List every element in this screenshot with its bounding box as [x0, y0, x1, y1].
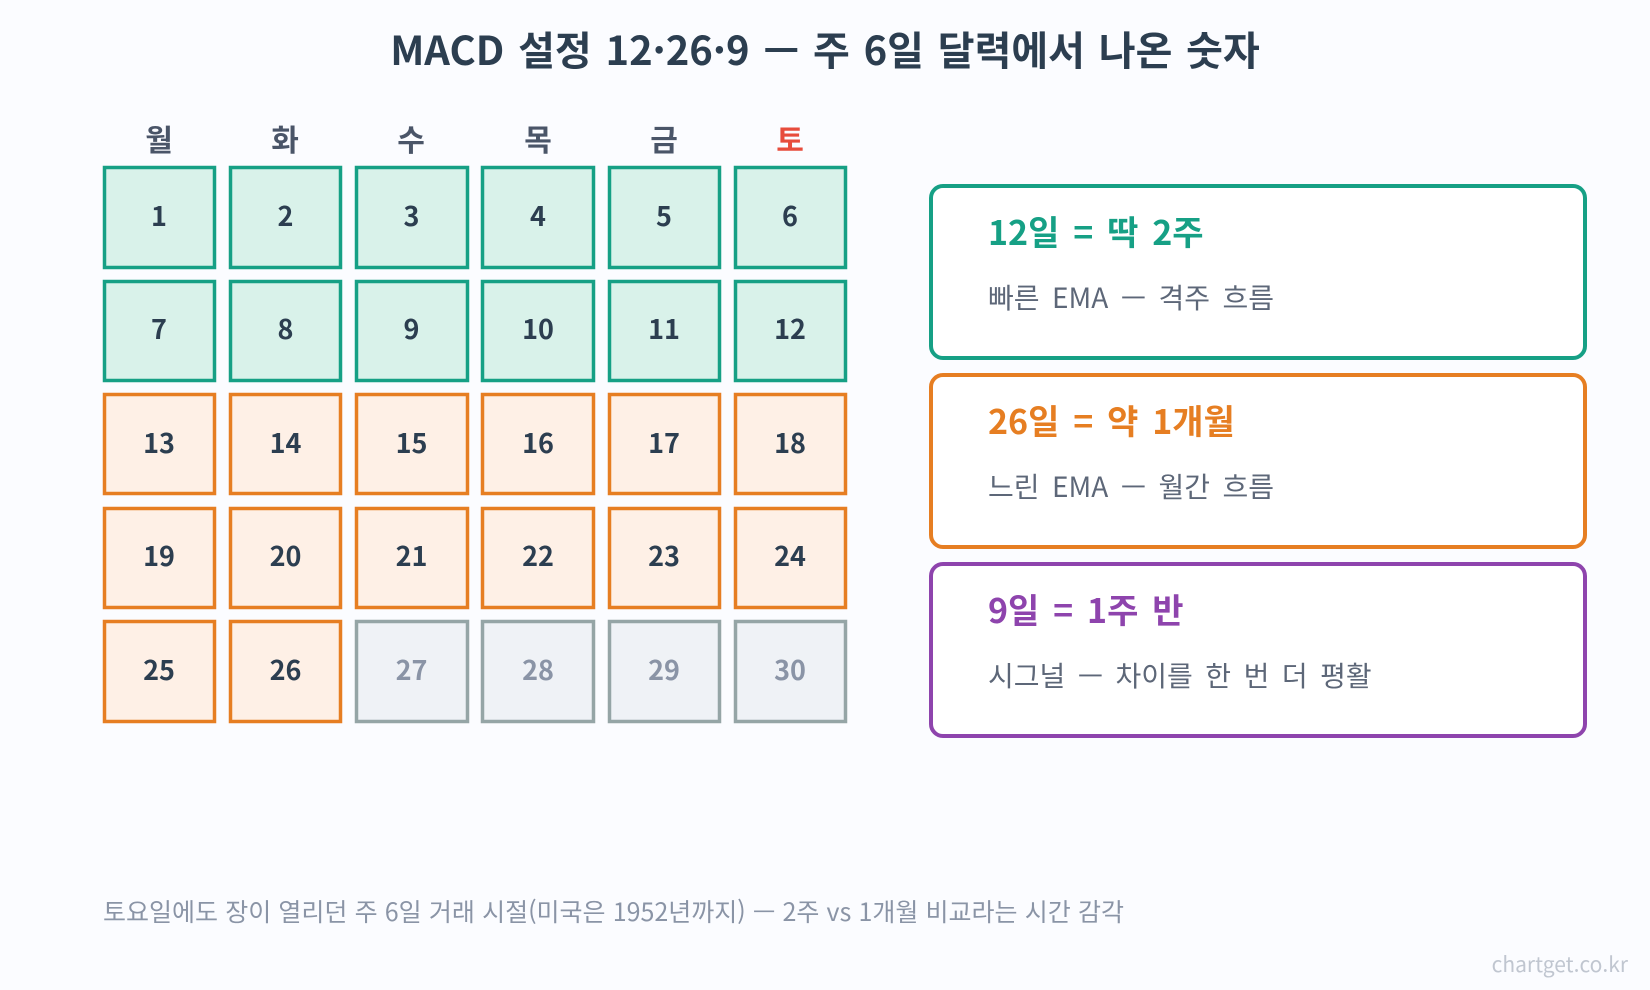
orange days 13 to 26: 14: [270, 422, 301, 461]
orange days 13 to 26: 25: [143, 649, 175, 688]
gray days 27 to 30: 30: [774, 649, 806, 688]
footnote: 토요일에도 장이 열리던 주 6일 거래 시절(미국은 1952년까지) — 2주 vs 1개월 비교라는 시간 감각: [103, 893, 1124, 929]
green days 1 to 12: 11: [648, 308, 680, 347]
panel: 26 days: 느린 EMA — 월간 흐름: [988, 466, 1274, 506]
orange days 13 to 26: 21: [396, 535, 427, 574]
green days 1 to 12: [104, 168, 846, 380]
green days 1 to 12: 5: [656, 195, 672, 234]
orange days 13 to 26: 15: [396, 422, 427, 461]
panel: 26 days: 26일 = 약 1개월: [988, 395, 1235, 444]
title: MACD 설정 12·26·9 — 주 6일 달력에서 나온 숫자: [390, 19, 1260, 77]
gray days 27 to 30: [356, 622, 846, 722]
green days 1 to 12: 8: [278, 308, 293, 347]
gray days 27 to 30: 29: [648, 649, 680, 688]
gray days 27 to 30: 27: [396, 649, 427, 688]
orange days 13 to 26: [104, 394, 846, 722]
green days 1 to 12: 7: [151, 308, 167, 347]
weekday header: 목: [524, 116, 552, 160]
green days 1 to 12: 2: [278, 195, 293, 234]
orange days 13 to 26: 24: [774, 535, 806, 574]
green days 1 to 12: 1: [151, 195, 167, 234]
green days 1 to 12: 12: [774, 308, 806, 347]
orange days 13 to 26: 19: [143, 535, 175, 574]
panel: 9 days: 시그널 — 차이를 한 번 더 평활: [988, 655, 1372, 695]
green days 1 to 12: 10: [522, 308, 554, 347]
orange days 13 to 26: 26: [270, 649, 301, 688]
orange days 13 to 26: 18: [774, 422, 806, 461]
gray days 27 to 30: 28: [522, 649, 554, 688]
weekday header: 토: [776, 116, 804, 160]
green days 1 to 12: 4: [530, 195, 546, 234]
weekday header: 월: [145, 116, 173, 160]
panel: 12 days: 빠른 EMA — 격주 흐름: [988, 277, 1274, 317]
weekday header: 화: [271, 116, 299, 160]
weekday header: 수: [397, 116, 425, 160]
panel: 12 days: [931, 186, 1585, 358]
weekday header: [145, 116, 804, 160]
panel: 12 days: 12일 = 딱 2주: [988, 206, 1204, 255]
panel: 26 days: [931, 375, 1585, 547]
green days 1 to 12: 6: [782, 195, 798, 234]
orange days 13 to 26: 22: [522, 535, 554, 574]
orange days 13 to 26: 23: [648, 535, 680, 574]
orange days 13 to 26: 17: [648, 422, 680, 461]
weekday header: 금: [650, 116, 678, 160]
green days 1 to 12: 9: [404, 308, 419, 347]
calendar grid: [104, 168, 846, 722]
green days 1 to 12: 3: [404, 195, 419, 234]
orange days 13 to 26: 20: [270, 535, 301, 574]
orange days 13 to 26: 16: [522, 422, 554, 461]
orange days 13 to 26: 13: [143, 422, 175, 461]
panel: 9 days: 9일 = 1주 반: [988, 584, 1183, 633]
panel: 9 days: [931, 564, 1585, 736]
watermark: chartget.co.kr: [1492, 949, 1629, 979]
